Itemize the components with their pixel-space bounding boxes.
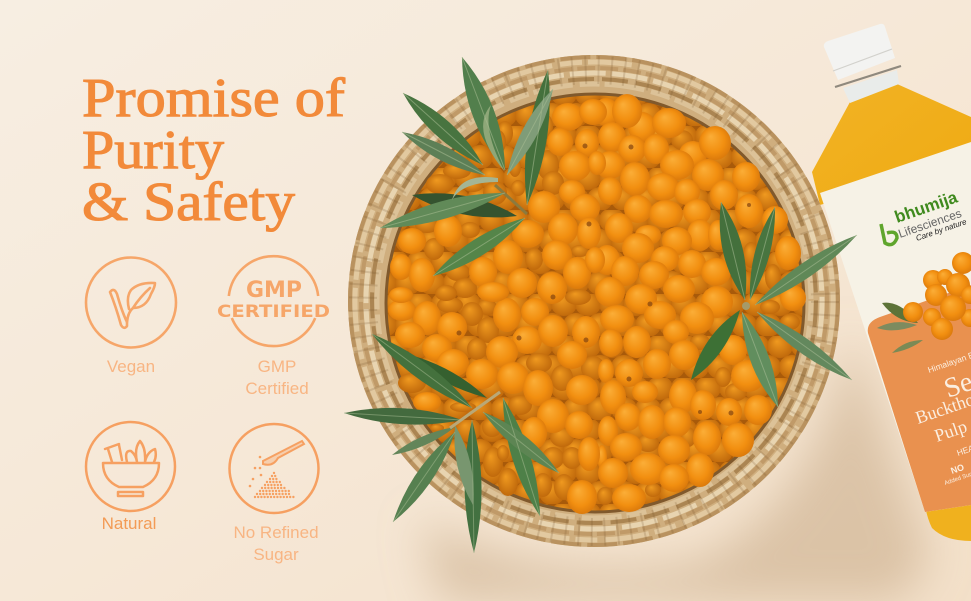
icon: vegan (86, 258, 176, 348)
label: GMP certified: Certified (245, 379, 309, 398)
bottle flange (835, 66, 901, 87)
basket and bottle shadow (420, 330, 930, 601)
icon: GMP certified (217, 256, 330, 346)
label: vegan: Vegan (107, 357, 155, 376)
brand logo: Care by nature (915, 217, 968, 243)
sprig: right leaves (691, 202, 857, 407)
title: & Safety (82, 171, 296, 232)
sprig: top left leaves (380, 57, 553, 276)
brand logo: bhumija (892, 187, 960, 227)
label: no refined sugar: No Refined (233, 523, 319, 542)
title (82, 67, 346, 232)
label product text: Pulp (932, 416, 970, 446)
berry calyx spots (456, 144, 751, 416)
bottle shoulder and juice (812, 84, 971, 205)
label: no refined sugar (233, 523, 319, 564)
label product text (913, 345, 971, 487)
brand logo: Lifesciences (896, 206, 963, 241)
bottle label orange band (868, 285, 971, 512)
bottle label panel (820, 142, 971, 512)
icon: GMP certified: CERTIFIED (217, 302, 330, 322)
label: GMP certified: GMP (258, 357, 296, 376)
title: Purity (82, 119, 225, 180)
title: Promise of (82, 67, 346, 128)
sprig: bottom left leaves (344, 334, 559, 553)
berries (388, 94, 806, 514)
icon: GMP certified: GMP (246, 278, 302, 303)
label: no refined sugar: Sugar (253, 545, 299, 564)
front berries (388, 94, 806, 514)
brand logo (881, 187, 968, 245)
bottle bottom juice (920, 470, 971, 541)
bottle (812, 24, 971, 541)
back berries (398, 115, 800, 505)
bottle neck (843, 70, 899, 103)
label: natural: Natural (102, 514, 156, 533)
icon: natural (86, 422, 175, 511)
label: GMP certified (245, 357, 309, 398)
icon: no refined sugar (230, 424, 318, 513)
bottle cap (824, 24, 895, 80)
label product text: NO (949, 462, 965, 476)
cap ring (833, 49, 892, 71)
label fruit artwork (877, 252, 971, 353)
basket (348, 55, 840, 547)
